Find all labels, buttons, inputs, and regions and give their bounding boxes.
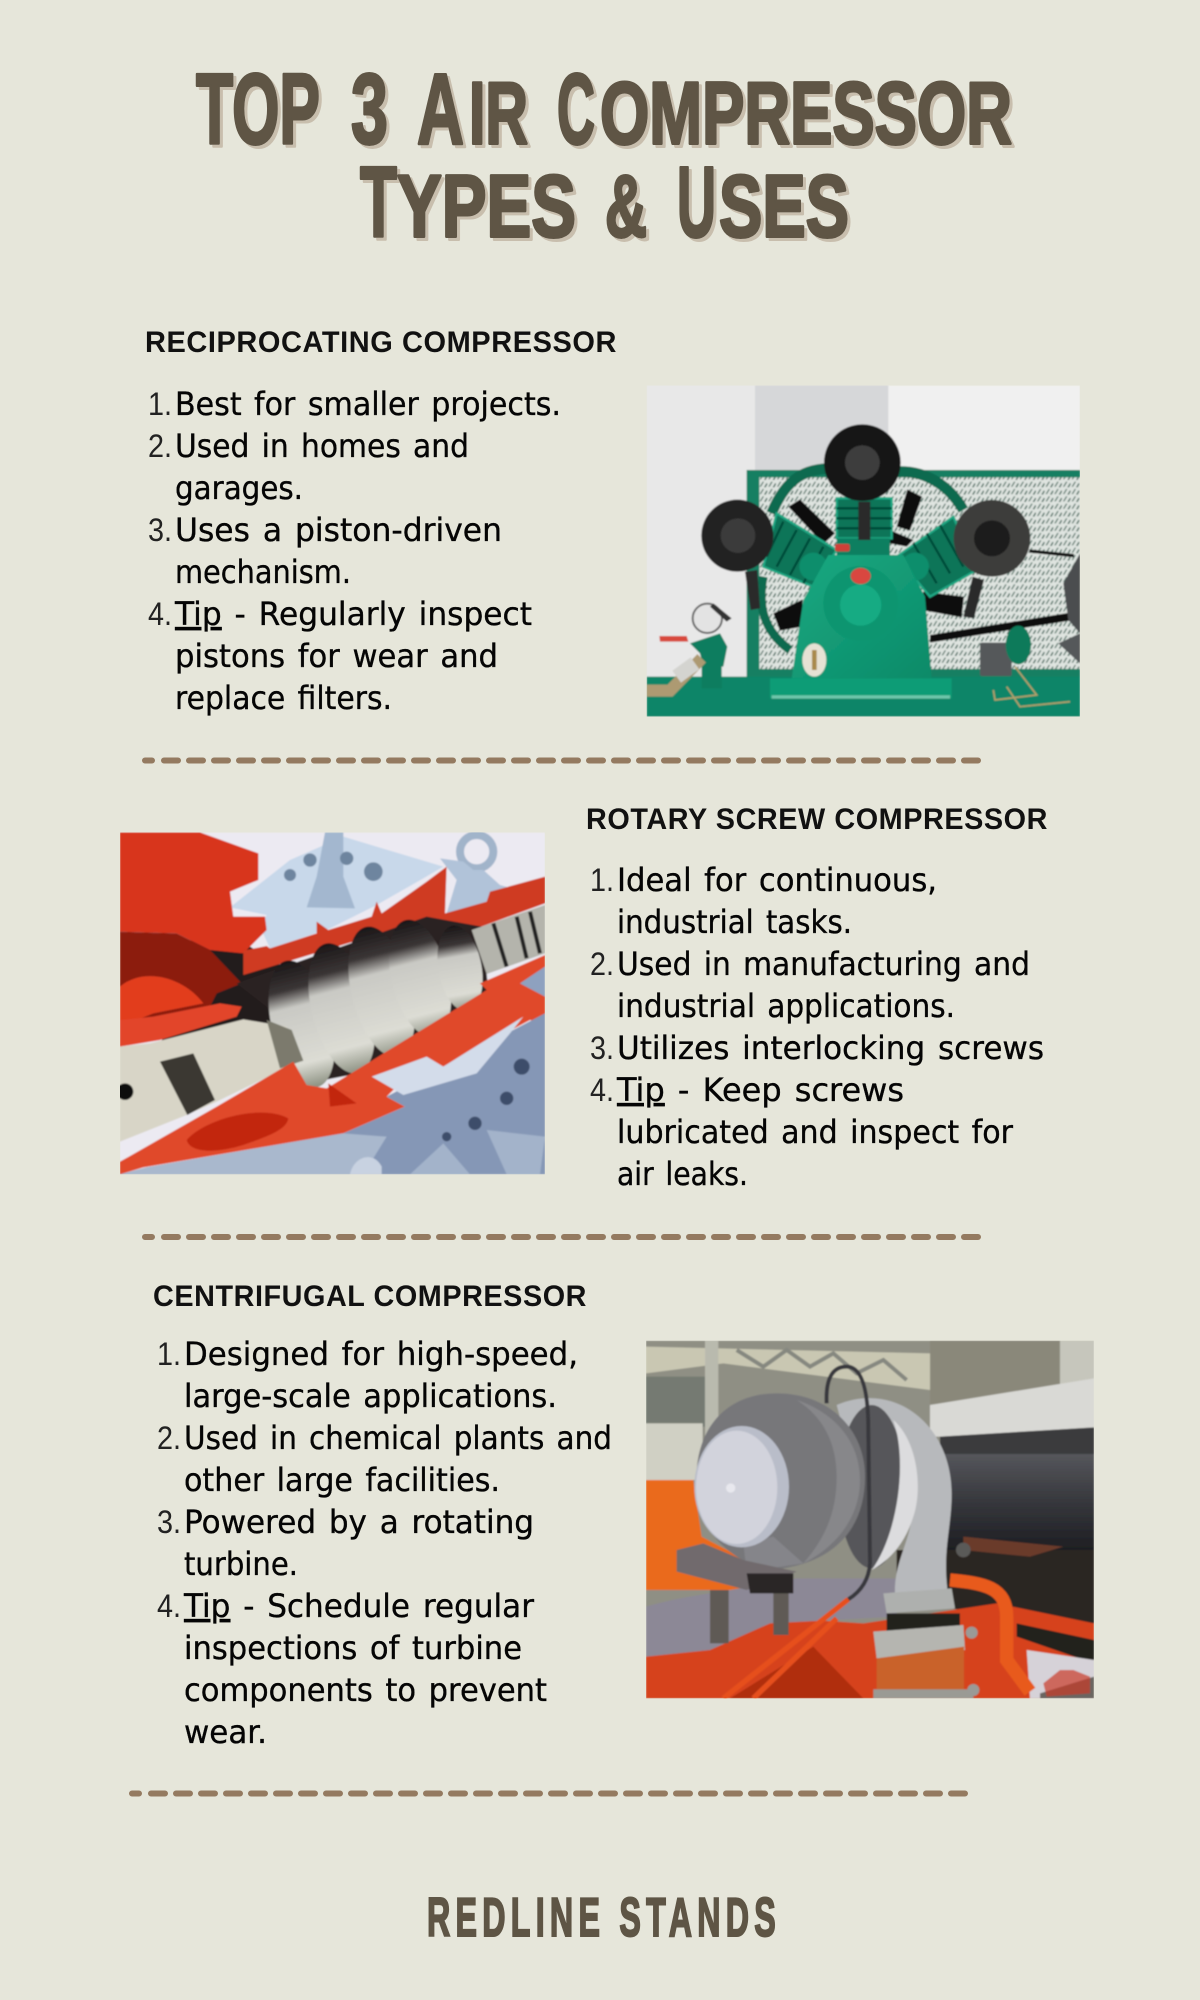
list: rotary screw points: air leaks.: [617, 1155, 748, 1193]
title: SES: [719, 156, 849, 256]
list: centrifugal points: inspections of turbine: [184, 1629, 522, 1667]
list: reciprocating points: Best for smaller projects.: [175, 385, 561, 423]
title: YPES: [397, 156, 576, 256]
panel: centrifugal compressor: [153, 1280, 1094, 1751]
list: centrifugal points: 2.: [157, 1420, 181, 1456]
list: reciprocating points: 4.: [148, 596, 172, 632]
list: reciprocating points: Used in homes and: [175, 427, 469, 465]
list: reciprocating points: replace filters.: [175, 679, 392, 717]
list: centrifugal points: wear.: [184, 1713, 267, 1751]
list: centrifugal points: 4.: [157, 1588, 181, 1624]
list: centrifugal points: components to prevent: [184, 1671, 547, 1709]
title: OMPRESSOR: [600, 64, 1012, 162]
photo: rotary screw cutaway: [117, 832, 545, 1174]
list: reciprocating points: [148, 385, 561, 717]
list: rotary screw points: Utilizes interlocking screws: [617, 1029, 1044, 1067]
heading: reciprocating compressor: RECIPROCATING COMPRESSOR: [145, 326, 617, 359]
title: &: [605, 156, 647, 256]
list: reciprocating points: 3.: [148, 512, 172, 548]
list: centrifugal points: other large facilities.: [184, 1461, 500, 1499]
photo: centrifugal turbine: [646, 1341, 1094, 1698]
list: rotary screw points: 1.: [590, 862, 614, 898]
list: reciprocating points: 2.: [148, 428, 172, 464]
title: U: [677, 146, 716, 258]
list: centrifugal points: large-scale applications.: [184, 1377, 557, 1415]
title: 3: [351, 54, 388, 166]
list: centrifugal points: Used in chemical plants and: [184, 1419, 612, 1457]
photo: reciprocating compressor pump: [647, 385, 1080, 717]
title: C: [557, 54, 595, 166]
list: reciprocating points: 1.: [148, 386, 172, 422]
list: rotary screw points: Used in manufacturing and: [617, 945, 1030, 983]
list: rotary screw points: industrial applications.: [617, 987, 955, 1025]
list: centrifugal points: Tip - Schedule regular: [183, 1587, 535, 1625]
list: rotary screw points: [590, 861, 1044, 1193]
list: rotary screw points: industrial tasks.: [617, 903, 852, 941]
heading: centrifugal compressor: CENTRIFUGAL COMPRESSOR: [153, 1280, 587, 1313]
list: centrifugal points: 1.: [157, 1336, 181, 1372]
divider: [145, 758, 978, 764]
list: rotary screw points: 2.: [590, 946, 614, 982]
list: centrifugal points: turbine.: [184, 1545, 298, 1583]
list: reciprocating points: mechanism.: [175, 553, 351, 591]
heading: rotary screw compressor: ROTARY SCREW COMPRESSOR: [586, 803, 1048, 836]
list: rotary screw points: Ideal for continuous,: [617, 861, 937, 899]
list: centrifugal points: [157, 1335, 612, 1751]
list: rotary screw points: 4.: [590, 1072, 614, 1108]
list: reciprocating points: pistons for wear and: [175, 637, 498, 675]
title: IR: [469, 64, 528, 162]
list: reciprocating points: Uses a piston-driven: [175, 511, 502, 549]
list: centrifugal points: Powered by a rotating: [184, 1503, 534, 1541]
list: rotary screw points: Tip - Keep screws: [616, 1071, 904, 1109]
list: reciprocating points: Tip - Regularly inspect: [174, 595, 532, 633]
list: rotary screw points: lubricated and inspect for: [617, 1113, 1014, 1151]
title: [196, 54, 1012, 258]
title: T: [360, 146, 397, 258]
divider: [132, 1790, 965, 1796]
list: reciprocating points: garages.: [175, 469, 303, 507]
footer brand: REDLINE STANDS: [427, 1886, 781, 1948]
panel: rotary screw compressor: [117, 803, 1048, 1193]
title: A: [417, 54, 464, 166]
title: TOP: [196, 54, 320, 166]
list: centrifugal points: Designed for high-speed,: [184, 1335, 578, 1373]
panel: reciprocating compressor: [145, 326, 1080, 717]
list: centrifugal points: 3.: [157, 1504, 181, 1540]
divider: [145, 1234, 978, 1240]
list: rotary screw points: 3.: [590, 1030, 614, 1066]
